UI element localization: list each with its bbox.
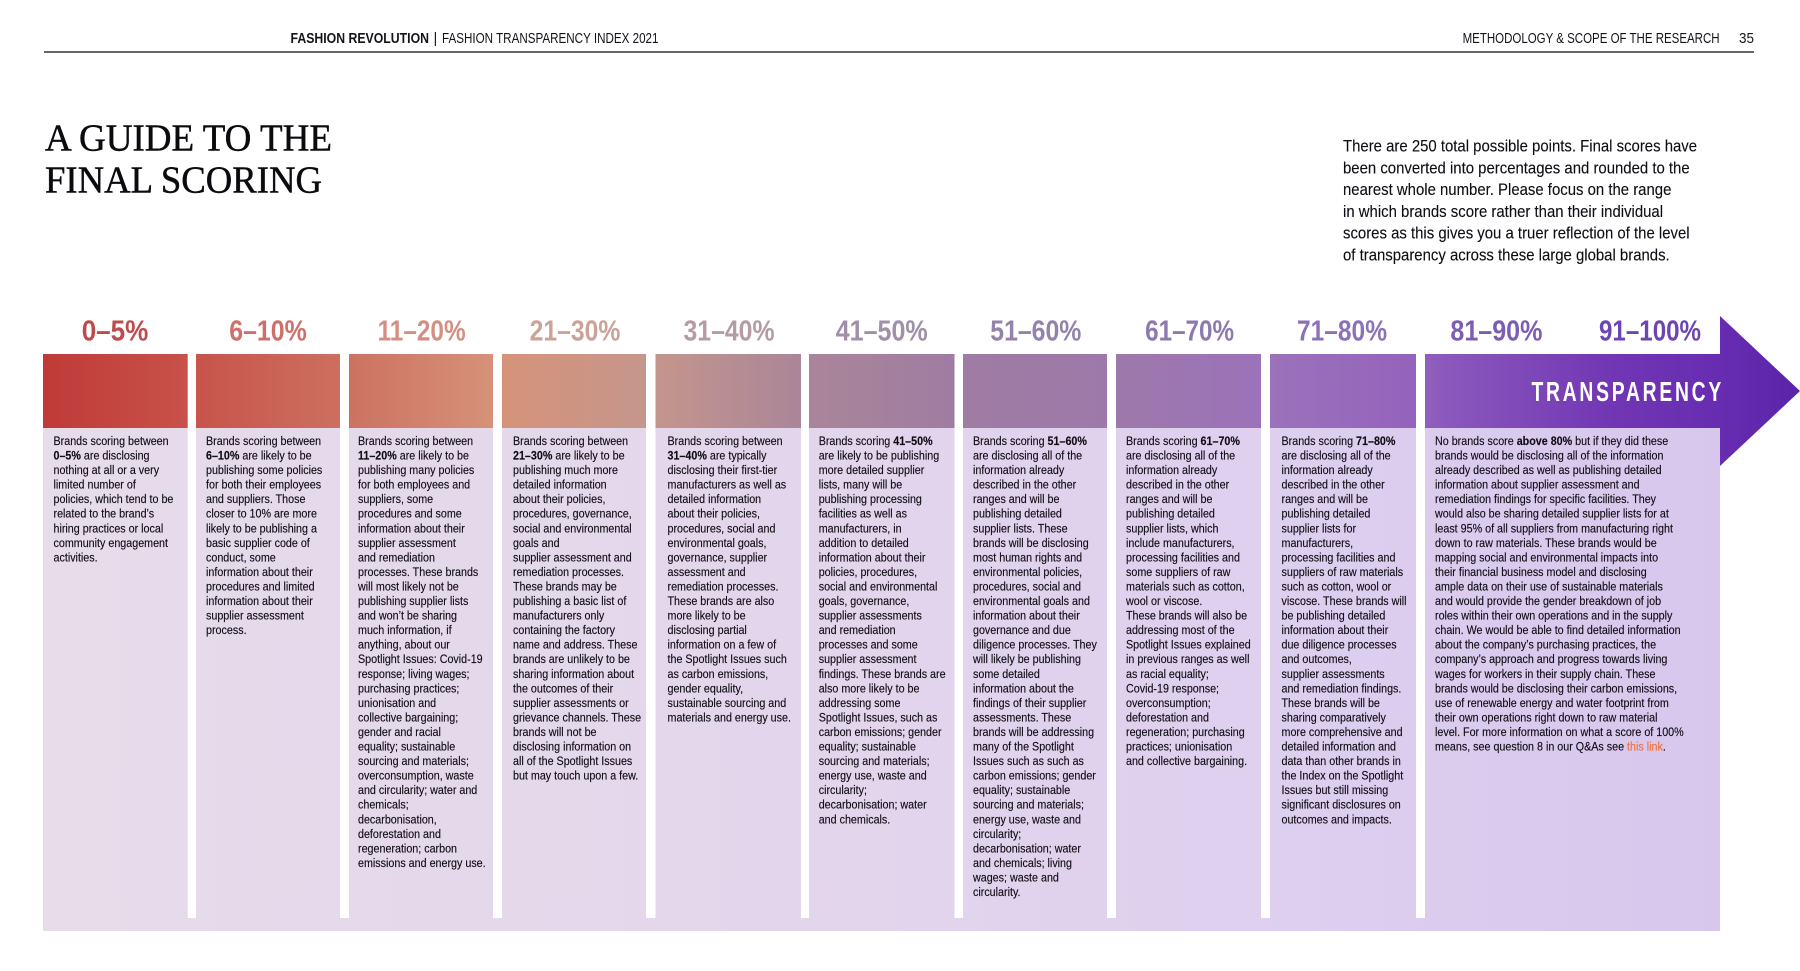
- description text: described in the other: [1282, 479, 1385, 492]
- description text: some suppliers of raw: [1126, 566, 1231, 579]
- description text: emissions and energy use.: [358, 857, 486, 870]
- description text: Brands scoring between: [54, 435, 169, 448]
- column: 81–100% with transparency arrow: [1425, 316, 1800, 919]
- description text: are disclosing all of the: [973, 450, 1082, 463]
- description text: regeneration; carbon: [358, 843, 457, 856]
- intro text: scores as this gives you a truer reflection of the level: [1343, 225, 1690, 243]
- description text: basic supplier code of: [206, 537, 311, 550]
- description text: assessments. These: [973, 712, 1071, 725]
- description text: 0–5% are disclosing: [54, 450, 150, 463]
- description text: Brands scoring between: [358, 435, 473, 448]
- colour bar: [656, 354, 801, 428]
- description text: lists, many will be: [819, 479, 902, 492]
- range heading: 51–60%: [990, 316, 1081, 348]
- description text: be publishing detailed: [1282, 610, 1385, 623]
- description text: procedures and some: [358, 508, 462, 521]
- description text: supplier assessment: [358, 537, 457, 550]
- running header: METHODOLOGY & SCOPE OF THE RESEARCH: [1463, 31, 1720, 47]
- description text: publishing detailed: [1126, 508, 1215, 521]
- description text: Covid-19 response;: [1126, 683, 1219, 696]
- description text: equality; sustainable: [358, 741, 455, 754]
- running header: FASHION REVOLUTION: [290, 31, 429, 47]
- description text: also more likely to be: [819, 683, 919, 696]
- description text: chemicals;: [358, 799, 409, 812]
- description text: are likely to be publishing: [819, 450, 939, 463]
- description text: circularity;: [973, 828, 1021, 841]
- description text: procedures, governance,: [513, 508, 632, 521]
- description text: overconsumption;: [1126, 697, 1211, 710]
- description text: Spotlight Issues, such as: [819, 712, 938, 725]
- description text: addressing some: [819, 697, 900, 710]
- column: 71–80%: [1270, 316, 1416, 919]
- description text: as carbon emissions,: [668, 668, 768, 681]
- description text: suppliers, some: [358, 494, 433, 506]
- description text: described in the other: [1126, 479, 1229, 492]
- description text: ranges and will be: [973, 494, 1059, 506]
- description text: gender equality,: [668, 683, 743, 696]
- description text: and outcomes,: [1282, 654, 1352, 666]
- description text: in previous ranges as well: [1126, 654, 1249, 666]
- description text: and circularity; water and: [358, 785, 477, 797]
- description text: ranges and will be: [1126, 494, 1212, 506]
- description text: hiring practices or local: [54, 523, 163, 535]
- description text: materials and energy use.: [668, 712, 791, 725]
- description text: information about their: [206, 595, 313, 608]
- description text: the Spotlight Issues such: [668, 654, 787, 666]
- description text: social and environmental: [819, 581, 937, 594]
- description text: sharing information about: [513, 668, 635, 681]
- running header: |: [434, 31, 437, 47]
- description text: addition to detailed: [819, 537, 909, 550]
- column: 21–30%: [502, 316, 646, 919]
- description text: energy use, waste and: [973, 814, 1081, 826]
- description text: materials such as cotton,: [1126, 581, 1245, 594]
- description text: decarbonisation,: [358, 814, 437, 826]
- description text: about their policies,: [513, 494, 605, 506]
- description text: publishing detailed: [1282, 508, 1370, 521]
- description text: Brands scoring 71–80%: [1282, 435, 1395, 448]
- description text: some detailed: [973, 668, 1040, 681]
- description text: decarbonisation; water: [973, 843, 1081, 856]
- description text: Brands scoring between: [668, 435, 783, 448]
- description text: disclosing partial: [668, 625, 747, 637]
- description text: disclosing their first-tier: [668, 465, 777, 477]
- description text: 6–10% are likely to be: [206, 450, 312, 463]
- description text: information about their: [206, 566, 313, 579]
- description text: Issues such as such as: [973, 756, 1084, 768]
- description text: more comprehensive and: [1282, 726, 1403, 739]
- description text: Brands scoring 41–50%: [819, 435, 933, 448]
- description text: publishing a basic list of: [513, 595, 627, 608]
- description text: Issues but still missing: [1282, 785, 1388, 797]
- description text: unionisation and: [358, 697, 436, 710]
- description text: supplier assessment: [819, 654, 917, 666]
- description text: much information, if: [358, 625, 452, 637]
- description text: governance and due: [973, 625, 1071, 637]
- description text: Spotlight Issues: Covid-19: [358, 654, 483, 666]
- range heading: 6–10%: [229, 316, 307, 348]
- range heading: 11–20%: [378, 316, 466, 348]
- description text: purchasing practices;: [358, 683, 459, 696]
- description text: goals and: [513, 537, 560, 550]
- description text: remediation findings for specific facilities. They: [1435, 494, 1656, 506]
- description text: company’s approach and progress towards living: [1435, 654, 1667, 666]
- description text: gender and racial: [358, 726, 441, 739]
- description text: but may touch upon a few.: [513, 770, 638, 783]
- description text: most human rights and: [973, 552, 1082, 565]
- description text: and won’t be sharing: [358, 610, 457, 623]
- description text: collective bargaining;: [358, 712, 458, 725]
- description text: detailed information and: [1282, 741, 1396, 754]
- description text: supplier assessments or: [513, 697, 629, 710]
- description text: processing facilities and: [1126, 552, 1240, 565]
- intro text: in which brands score rather than their individual: [1343, 203, 1663, 221]
- title: FINAL SCORING: [45, 160, 322, 202]
- description text: publishing detailed: [973, 508, 1062, 521]
- description text: remediation processes.: [668, 581, 778, 594]
- description text: many of the Spotlight: [973, 741, 1075, 754]
- running header: FASHION TRANSPARENCY INDEX 2021: [442, 31, 658, 47]
- arrow: transparency: [1425, 316, 1800, 466]
- description text: These brands are also: [668, 595, 774, 608]
- description text: nothing at all or a very: [54, 465, 159, 477]
- description text: publishing many policies: [358, 465, 475, 477]
- description text: supplier lists for: [1282, 523, 1356, 535]
- description text: limited number of: [54, 479, 137, 492]
- description panel: [809, 428, 954, 919]
- description text: Brands scoring 51–60%: [973, 435, 1087, 448]
- description text: community engagement: [54, 537, 169, 550]
- description text: include manufacturers,: [1126, 537, 1235, 550]
- description text: all of the Spotlight Issues: [513, 756, 633, 768]
- description text: supplier assessments: [1282, 668, 1385, 681]
- range heading: 61–70%: [1145, 316, 1234, 348]
- description text: environmental policies,: [973, 566, 1082, 579]
- description text: overconsumption, waste: [358, 770, 474, 783]
- description text: outcomes and impacts.: [1282, 814, 1392, 826]
- description text: are disclosing all of the: [1282, 450, 1391, 463]
- description text: would also be sharing detailed supplier lists for at: [1434, 508, 1670, 521]
- description text: grievance channels. These: [513, 712, 641, 725]
- description text: containing the factory: [513, 625, 615, 637]
- description text: sharing comparatively: [1282, 712, 1386, 725]
- description text: ranges and will be: [1282, 494, 1368, 506]
- column: 51–60%: [963, 316, 1107, 919]
- description text: related to the brand’s: [54, 508, 154, 521]
- description text: publishing supplier lists: [358, 595, 469, 608]
- description text: sourcing and materials;: [973, 799, 1084, 812]
- description text: supplier lists. These: [973, 523, 1068, 535]
- description text: likely to be publishing a: [206, 523, 318, 535]
- description text: 11–20% are likely to be: [358, 450, 469, 463]
- colour bar: [1116, 354, 1261, 428]
- colour bar: [963, 354, 1107, 428]
- description text: manufacturers, in: [819, 523, 902, 535]
- intro text: been converted into percentages and rounded to the: [1343, 160, 1690, 177]
- colour bar: [196, 354, 340, 428]
- description text: carbon emissions; gender: [819, 726, 942, 739]
- colour bar: [43, 354, 188, 428]
- colour bar: [502, 354, 646, 428]
- description text: information already: [973, 465, 1064, 477]
- description text: addressing most of the: [1126, 625, 1235, 637]
- description text: brands would be disclosing their carbon emissions,: [1435, 683, 1677, 696]
- description text: ample data on their use of sustainable materials: [1435, 581, 1663, 594]
- description text: No brands score above 80% but if they did these: [1435, 435, 1668, 448]
- description text: assessment and: [668, 566, 746, 579]
- description text: more detailed supplier: [819, 465, 924, 477]
- description text: regeneration; purchasing: [1126, 726, 1245, 739]
- description text: supplier lists, which: [1126, 523, 1218, 535]
- column: 0–5%: [43, 316, 188, 919]
- intro text: There are 250 total possible points. Final scores have: [1343, 138, 1697, 156]
- description text: publishing processing: [819, 494, 922, 506]
- description text: remediation processes.: [513, 566, 624, 579]
- column: 6–10%: [196, 316, 340, 919]
- description text: processing facilities and: [1282, 552, 1395, 565]
- description text: information on a few of: [668, 639, 777, 652]
- description text: for both employees and: [358, 479, 470, 492]
- description text: suppliers of raw materials: [1282, 566, 1403, 579]
- description text: brands will not be: [513, 726, 597, 739]
- description text: goals, governance,: [819, 595, 909, 608]
- description text: supplier assessments: [819, 610, 922, 623]
- description text: and collective bargaining.: [1126, 756, 1247, 768]
- description text: and would provide the gender breakdown of job: [1435, 595, 1661, 608]
- description panel: [1425, 428, 1720, 919]
- description text: mapping social and environmental impacts into: [1435, 552, 1658, 565]
- description text: Brands scoring between: [513, 435, 628, 448]
- description text: environmental goals and: [973, 595, 1090, 608]
- description text: and chemicals; living: [973, 857, 1072, 870]
- description text: the outcomes of their: [513, 683, 613, 696]
- intro text: of transparency across these large global brands.: [1343, 247, 1670, 265]
- description text: manufacturers as well as: [668, 479, 786, 492]
- column: 41–50%: [809, 316, 954, 919]
- description text: more likely to be: [668, 610, 746, 623]
- description text: for both their employees: [206, 479, 321, 492]
- description text: means, see question 8 in our Q&As see this link.: [1435, 741, 1666, 754]
- description text: deforestation and: [358, 828, 441, 841]
- description text: Spotlight Issues explained: [1126, 639, 1251, 652]
- description text: level. For more information on what a score of 100%: [1435, 726, 1684, 739]
- description text: activities.: [54, 552, 98, 565]
- column: 61–70%: [1116, 316, 1261, 919]
- description panel: [196, 428, 340, 919]
- description text: down to raw materials. These brands would be: [1435, 537, 1657, 550]
- description text: response; living wages;: [358, 668, 470, 681]
- description text: roles within their own operations and in the supply: [1435, 610, 1673, 623]
- description text: wages; waste and: [972, 872, 1059, 885]
- description text: process.: [206, 625, 247, 637]
- description text: significant disclosures on: [1282, 799, 1401, 812]
- description panel: [349, 428, 493, 919]
- description text: These brands will be: [1282, 697, 1380, 710]
- description text: carbon emissions; gender: [973, 770, 1096, 783]
- description text: equality; sustainable: [973, 785, 1070, 797]
- description panel: [43, 428, 188, 919]
- description text: conduct, some: [206, 552, 276, 565]
- column: 31–40%: [656, 316, 801, 919]
- description text: circularity.: [973, 886, 1021, 899]
- description text: circularity;: [819, 785, 867, 797]
- description text: practices; unionisation: [1126, 741, 1232, 754]
- description text: 31–40% are typically: [668, 450, 767, 463]
- title: [45, 118, 332, 202]
- description text: policies, procedures,: [819, 566, 917, 579]
- description text: supplier assessment: [206, 610, 305, 623]
- running header: [290, 31, 1754, 47]
- description text: and remediation: [819, 625, 896, 637]
- description text: wages for workers in their supply chain. These: [1434, 668, 1655, 681]
- description panel: [1270, 428, 1416, 919]
- description text: brands will be addressing: [973, 726, 1094, 739]
- description text: viscose. These brands will: [1282, 595, 1407, 608]
- description text: diligence processes. They: [973, 639, 1097, 652]
- description text: due diligence processes: [1282, 639, 1397, 652]
- description text: closer to 10% are more: [206, 508, 317, 521]
- description text: information about their: [1282, 625, 1388, 637]
- description text: equality; sustainable: [819, 741, 916, 754]
- description text: energy use, waste and: [819, 770, 927, 783]
- description text: policies, which tend to be: [54, 494, 173, 506]
- description panel: [1116, 428, 1261, 919]
- description panel: [502, 428, 646, 919]
- description text: detailed information: [668, 494, 761, 506]
- description text: and chemicals.: [819, 814, 890, 826]
- description text: processes. These brands: [358, 566, 479, 579]
- description text: described in the other: [973, 479, 1076, 492]
- description text: These brands will also be: [1126, 610, 1247, 623]
- description text: the Index on the Spotlight: [1282, 770, 1404, 783]
- description text: will most likely not be: [357, 581, 459, 594]
- description text: deforestation and: [1126, 712, 1209, 725]
- description text: processes and some: [819, 639, 918, 652]
- description text: 21–30% are likely to be: [513, 450, 625, 463]
- description text: findings. These brands are: [819, 668, 946, 681]
- description text: information about their: [358, 523, 465, 535]
- description text: governance, supplier: [668, 552, 767, 565]
- range heading: 71–80%: [1297, 316, 1387, 348]
- description panel: [656, 428, 801, 919]
- range heading: 0–5%: [82, 316, 148, 348]
- description text: Brands scoring between: [206, 435, 321, 448]
- description text: information already: [1282, 465, 1373, 477]
- description text: decarbonisation; water: [819, 799, 927, 812]
- intro text: nearest whole number. Please focus on the range: [1343, 181, 1672, 199]
- description text: anything, about our: [358, 639, 450, 652]
- description text: already described as well as publishing detailed: [1435, 465, 1662, 477]
- range heading: 31–40%: [684, 316, 775, 348]
- range heading: 21–30%: [530, 316, 621, 348]
- description text: publishing much more: [513, 465, 618, 477]
- description text: information about the: [973, 683, 1074, 696]
- description text: as racial equality;: [1126, 668, 1209, 681]
- description text: findings of their supplier: [973, 697, 1086, 710]
- description text: publishing some policies: [206, 465, 323, 477]
- description text: will likely be publishing: [972, 654, 1081, 666]
- description text: social and environmental: [513, 523, 632, 535]
- description text: such as cotton, wool or: [1282, 581, 1391, 594]
- description text: disclosing information on: [513, 741, 631, 754]
- description text: wool or viscose.: [1125, 595, 1202, 608]
- colour bar: [1270, 354, 1416, 428]
- description text: sourcing and materials;: [358, 756, 469, 768]
- description text: name and address. These: [513, 639, 637, 652]
- description text: data than other brands in: [1282, 756, 1401, 768]
- description text: Brands scoring 61–70%: [1126, 435, 1240, 448]
- description text: and remediation: [358, 552, 435, 565]
- colour bar: [349, 354, 493, 428]
- range heading: 91–100%: 91–100%: [1599, 316, 1701, 348]
- description text: chain. We would be able to find detailed information: [1435, 625, 1681, 637]
- description text: manufacturers,: [1282, 537, 1353, 550]
- description text: least 95% of all suppliers from manufacturing right: [1435, 523, 1674, 535]
- description text: supplier assessment and: [513, 552, 632, 565]
- panel base strip: [43, 918, 1720, 931]
- description text: information about supplier assessment and: [1435, 479, 1640, 492]
- description text: procedures and limited: [206, 581, 315, 594]
- description text: and suppliers. Those: [206, 494, 305, 506]
- description text: sustainable sourcing and: [668, 697, 786, 710]
- description text: their own operations right down to raw material: [1435, 712, 1657, 725]
- description panel: [963, 428, 1107, 919]
- description text: facilities as well as: [819, 508, 907, 521]
- description text: and remediation findings.: [1282, 683, 1401, 696]
- description text: procedures, social and: [668, 523, 775, 535]
- description text: brands will be disclosing: [973, 537, 1089, 550]
- range heading: 41–50%: [836, 316, 928, 348]
- description text: brands would be disclosing all of the information: [1435, 450, 1663, 463]
- description text: about their policies,: [668, 508, 760, 521]
- title: A GUIDE TO THE: [45, 118, 332, 160]
- description text: sourcing and materials;: [819, 756, 930, 768]
- description text: are disclosing all of the: [1126, 450, 1235, 463]
- running header: 35: [1739, 31, 1754, 47]
- description text: information about their: [819, 552, 926, 565]
- description text: about the company’s purchasing practices, the: [1435, 639, 1656, 652]
- description text: information about their: [973, 610, 1080, 623]
- description text: procedures, social and: [973, 581, 1081, 594]
- colour bar: [809, 354, 954, 428]
- description text: detailed information: [513, 479, 607, 492]
- description text: manufacturers only: [513, 610, 604, 623]
- description text: These brands may be: [513, 581, 617, 594]
- description text: their financial business model and disclosing: [1435, 566, 1647, 579]
- range heading: 81–90%: 81–90%: [1450, 316, 1543, 348]
- description text: environmental goals,: [668, 537, 767, 550]
- description text: brands are unlikely to be: [513, 654, 630, 666]
- description text: information already: [1126, 465, 1217, 477]
- description text: use of renewable energy and water footprint from: [1435, 697, 1669, 710]
- column: 11–20%: [349, 316, 493, 919]
